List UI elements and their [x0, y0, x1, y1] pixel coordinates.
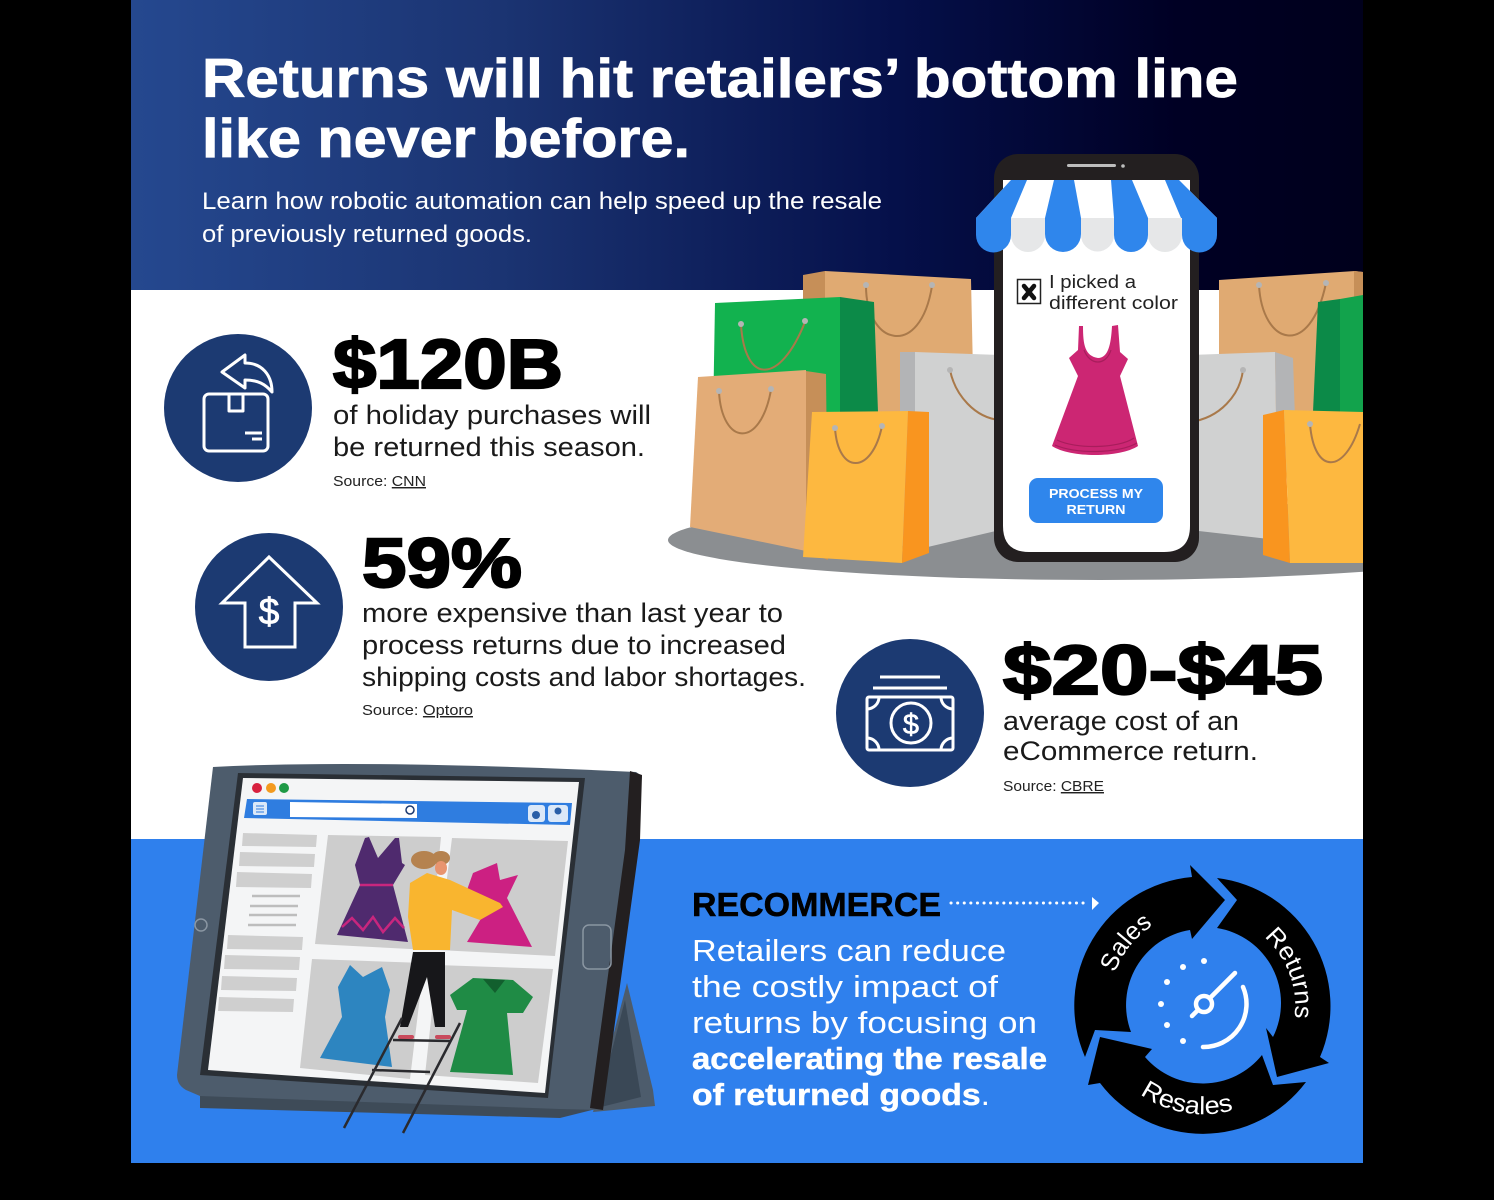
arrow: returns: [1217, 878, 1330, 1077]
ladder: [344, 1018, 460, 1133]
recommerce body: accelerating the resale: [692, 1041, 1047, 1076]
stat value: 59%: [362, 524, 522, 602]
sidebar lines: [248, 896, 300, 925]
arrow: sales: Sales: [1101, 916, 1151, 970]
gray bag left: [900, 352, 1000, 550]
subtitle: [202, 188, 882, 248]
title: [202, 47, 1238, 169]
window controls: [252, 783, 289, 793]
source: Source: CNN: [333, 474, 426, 490]
dress: [1052, 325, 1138, 455]
source: Source: Optoro: [362, 703, 473, 719]
stat value: $20-$45: [1003, 631, 1323, 709]
return reason text: different color: [1049, 293, 1178, 313]
product cards: [300, 835, 568, 1083]
recommerce text: [692, 886, 1099, 1112]
yellow bag right: [1263, 410, 1363, 563]
awning: [976, 180, 1217, 252]
browser bar: [244, 799, 572, 825]
icon: money: $: [903, 709, 919, 741]
return reason text: I picked a: [1049, 272, 1137, 292]
icon: rising cost arrow: [195, 533, 343, 681]
title: like never before.: [202, 107, 690, 169]
illustration: shopping bags and phone: [668, 154, 1363, 580]
yellow front bag: [803, 411, 929, 563]
phone: [976, 154, 1217, 562]
tablet screen: [200, 773, 585, 1133]
back tan bag left: [803, 271, 974, 420]
recommerce body: [692, 933, 1047, 1112]
stat description: average cost of an: [1003, 706, 1239, 736]
recommerce band: [131, 839, 1363, 1163]
arrow: resales: Resales: [1142, 1080, 1232, 1114]
stat: $120B: [164, 325, 651, 490]
green bag right: [1313, 295, 1363, 412]
arrow: sales: [1074, 865, 1225, 1057]
arrow: resales: [1088, 1037, 1306, 1134]
checkbox: [1018, 280, 1040, 304]
stat value: $120B: [333, 325, 563, 403]
icon: money: [836, 639, 984, 787]
phone speaker: [1067, 164, 1125, 168]
tablet buttons: [195, 919, 611, 969]
illustration: tablet storefront: [177, 764, 655, 1133]
stat description: [362, 598, 806, 692]
tablet body: [177, 764, 642, 1110]
title: Returns will hit retailers’ bottom line: [202, 47, 1238, 109]
ground shadow: [668, 504, 1363, 580]
stat description: [333, 400, 651, 462]
icon: returned package: [164, 334, 312, 482]
process my return button: PROCESS MY: [1049, 486, 1143, 501]
recommerce heading: RECOMMERCE: [692, 886, 941, 923]
process my return button: RETURN: [1066, 502, 1126, 517]
source: Source: CBRE: [1003, 779, 1104, 795]
blue dress: [320, 965, 392, 1067]
stat description: process returns due to increased: [362, 630, 786, 660]
purple dress: [337, 837, 408, 942]
stat description: be returned this season.: [333, 432, 645, 462]
stat: 59%: [195, 524, 806, 719]
return reason text: [1050, 274, 1178, 309]
process my return button: [1029, 478, 1163, 523]
stat description: eCommerce return.: [1003, 736, 1258, 766]
stat description: shipping costs and labor shortages.: [362, 662, 806, 692]
stat description: more expensive than last year to: [362, 598, 783, 628]
back tan bag right: [1219, 271, 1363, 420]
cycle diagram: [1074, 865, 1330, 1134]
stat description: of holiday purchases will: [333, 400, 651, 430]
person on ladder: [400, 851, 503, 1037]
tablet stand: [593, 983, 655, 1112]
recommerce body: of returned goods .: [692, 1077, 990, 1112]
tablet base: [200, 1094, 600, 1118]
green shirt: [450, 978, 533, 1075]
gray bag right: [1190, 352, 1295, 540]
tablet dark edge: [590, 771, 642, 1110]
recommerce body: Retailers can reduce: [692, 933, 1006, 968]
subtitle: of previously returned goods.: [202, 221, 532, 248]
stat description: [1003, 706, 1258, 766]
header panel: [131, 0, 1363, 290]
arrow: returns: Returns: [1266, 926, 1308, 1018]
subtitle: Learn how robotic automation can help speed up the resale: [202, 188, 882, 215]
sidebar blocks: [218, 833, 317, 1012]
recommerce body: returns by focusing on: [692, 1005, 1037, 1040]
green bag left: [713, 297, 878, 420]
icon: rising cost arrow: $: [259, 591, 279, 632]
pink dress: [467, 863, 532, 947]
tan front bag: [690, 370, 828, 560]
dotted arrow: [951, 897, 1099, 910]
stat: $20-$45: [836, 631, 1323, 795]
icon: speed gauge: [1158, 958, 1247, 1047]
white content panel: [131, 0, 1363, 1163]
recommerce body: the costly impact of: [692, 969, 998, 1004]
